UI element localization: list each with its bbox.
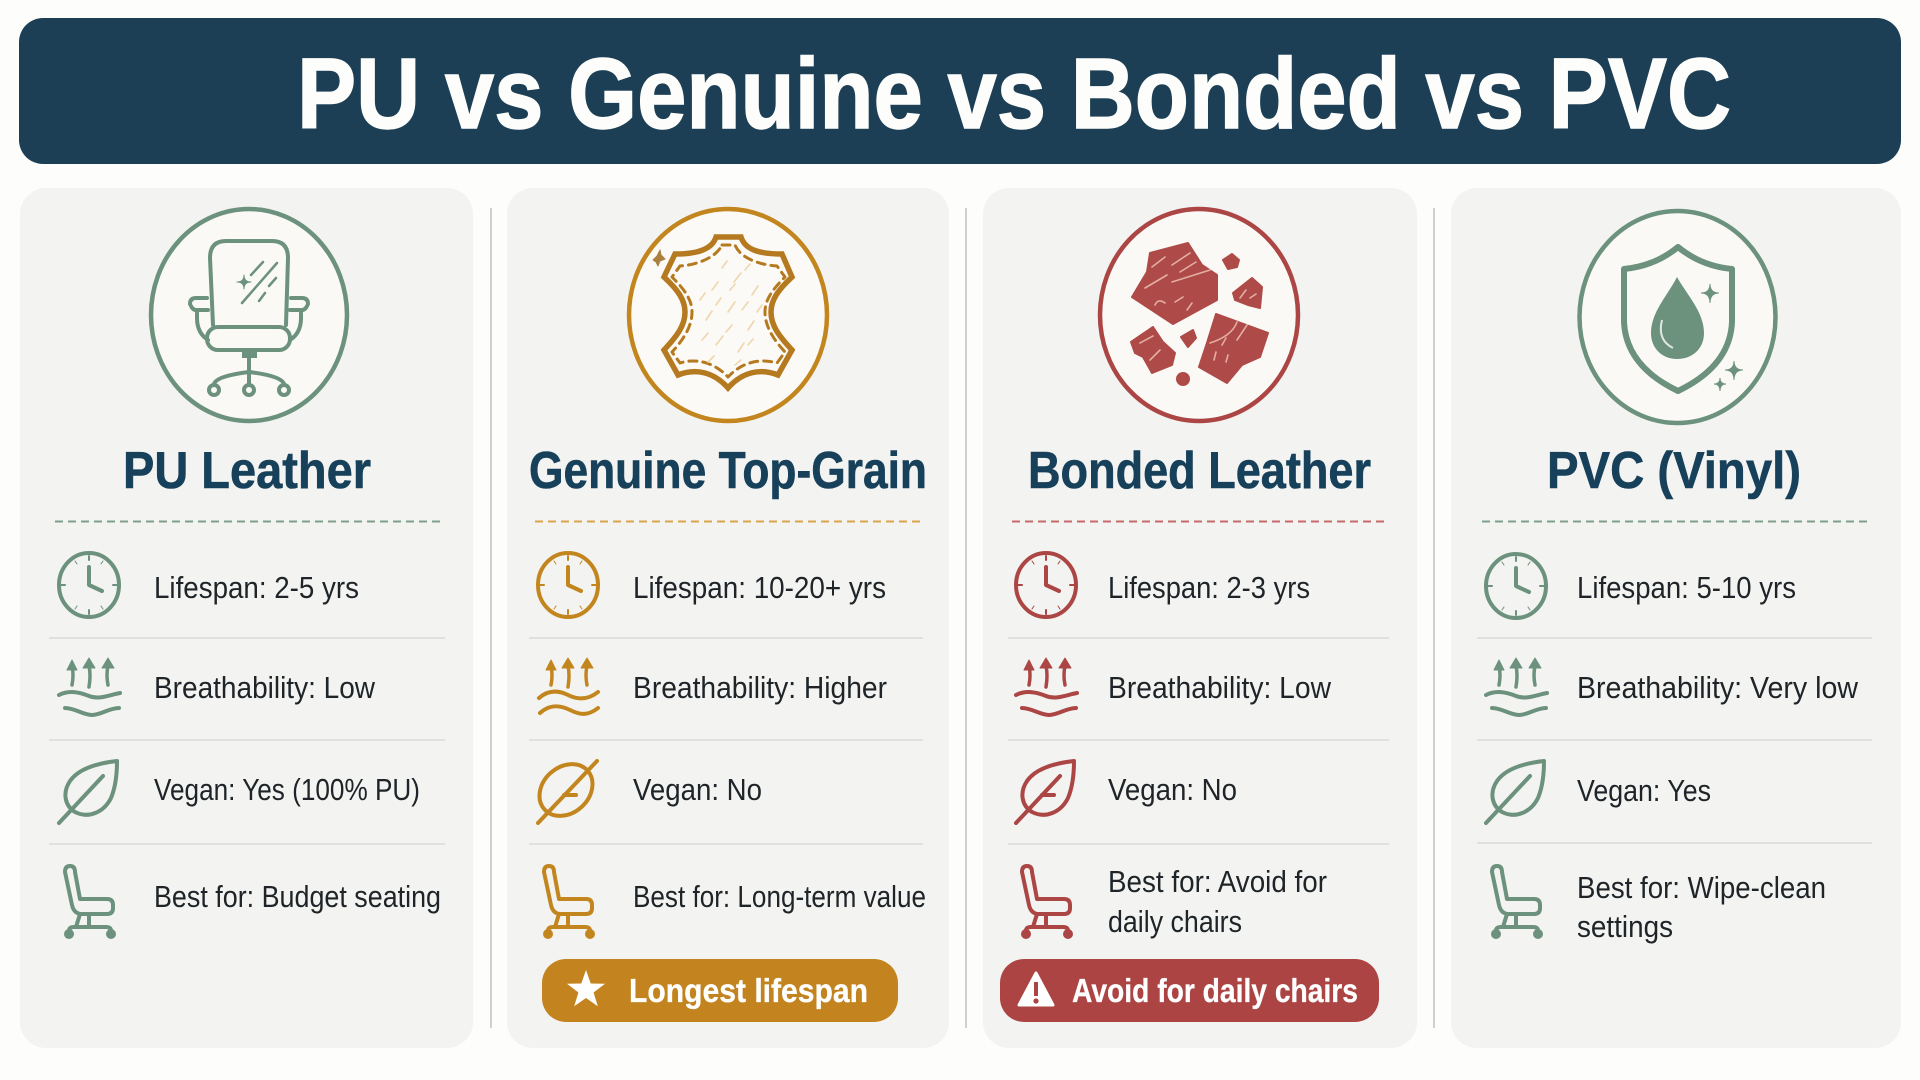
icon: clock xyxy=(1486,554,1546,618)
row: vegan: Vegan: Yes (100% PU) xyxy=(154,772,420,807)
row: breathability xyxy=(539,658,887,714)
icon: bonded scraps in circle xyxy=(1100,209,1298,421)
icon: star xyxy=(567,970,605,1006)
best-for text xyxy=(1108,864,1327,939)
icon: crossed leaf xyxy=(529,754,603,826)
row: lifespan: Lifespan: 2-3 yrs xyxy=(1108,570,1310,605)
panel: Genuine Top-Grain xyxy=(507,188,949,1048)
row: lifespan xyxy=(1016,553,1310,617)
panel: Bonded Leather xyxy=(983,188,1417,1048)
best-for text: Best for: Wipe-clean xyxy=(1577,870,1826,905)
row: breathability: Breathability: Very low xyxy=(1577,670,1859,705)
icon: office chair in circle xyxy=(151,209,347,421)
icon: leaf xyxy=(59,761,117,823)
row: lifespan xyxy=(538,553,886,617)
icon: breathability xyxy=(539,658,598,714)
icon: breathability xyxy=(59,658,120,715)
badge: avoid for daily chairs xyxy=(1000,959,1379,1022)
row: lifespan xyxy=(1486,554,1796,618)
icon: chair xyxy=(65,866,114,937)
row: best for xyxy=(65,866,441,937)
heading: PVC (Vinyl) xyxy=(1547,442,1801,500)
row: best for xyxy=(544,866,926,937)
row: breathability xyxy=(1486,658,1859,715)
row: vegan: Vegan: No xyxy=(633,772,762,807)
row: best for xyxy=(1492,866,1826,944)
best-for text: daily chairs xyxy=(1108,904,1242,939)
row: vegan: Vegan: No xyxy=(1108,772,1237,807)
row: vegan xyxy=(1016,761,1237,823)
icon: leather hide in circle xyxy=(629,209,827,421)
panel: PVC (Vinyl) xyxy=(1451,188,1901,1048)
row: breathability: Breathability: Higher xyxy=(633,670,887,705)
icon: chair xyxy=(544,866,593,937)
row: breathability: Breathability: Low xyxy=(154,670,376,705)
title banner xyxy=(19,18,1901,164)
icon: clock xyxy=(1016,553,1076,617)
row: breathability xyxy=(59,658,376,715)
row: vegan xyxy=(529,754,762,826)
row: breathability: Breathability: Low xyxy=(1108,670,1332,705)
row: best for xyxy=(1022,864,1327,939)
row: vegan xyxy=(1486,761,1711,823)
row: lifespan: Lifespan: 2-5 yrs xyxy=(154,570,359,605)
row: best for: Best for: Long-term value xyxy=(633,879,926,914)
icon: chair xyxy=(1022,866,1071,937)
badge: avoid for daily chairs: Avoid for daily chairs xyxy=(1072,972,1358,1009)
badge: longest lifespan xyxy=(542,959,898,1022)
heading: Genuine Top-Grain xyxy=(529,442,927,500)
icon: shield and droplet in circle xyxy=(1580,211,1776,423)
icon: leaf xyxy=(1486,761,1544,823)
row: vegan xyxy=(59,761,420,823)
icon: leaf xyxy=(1016,761,1074,823)
panel: PU Leather xyxy=(20,188,473,1048)
heading: PU Leather xyxy=(123,442,371,500)
icon: warning triangle xyxy=(1019,973,1053,1005)
icon: chair xyxy=(1492,866,1541,937)
row: lifespan: Lifespan: 10-20+ yrs xyxy=(633,570,886,605)
row: best for: Best for: Budget seating xyxy=(154,879,441,914)
badge: longest lifespan: Longest lifespan xyxy=(629,972,868,1009)
icon: breathability xyxy=(1486,658,1547,715)
heading: Bonded Leather xyxy=(1028,442,1371,500)
row: lifespan: Lifespan: 5-10 yrs xyxy=(1577,570,1796,605)
icon: breathability xyxy=(1016,658,1077,715)
row: vegan: Vegan: Yes xyxy=(1577,773,1711,808)
icon: clock xyxy=(538,553,598,617)
row: breathability xyxy=(1016,658,1332,715)
best-for text xyxy=(1577,870,1826,944)
title text: PU vs Genuine vs Bonded vs PVC xyxy=(297,38,1731,150)
best-for text: settings xyxy=(1577,909,1673,944)
icon: clock xyxy=(59,553,119,617)
row: lifespan xyxy=(59,553,359,617)
best-for text: Best for: Avoid for xyxy=(1108,864,1327,899)
